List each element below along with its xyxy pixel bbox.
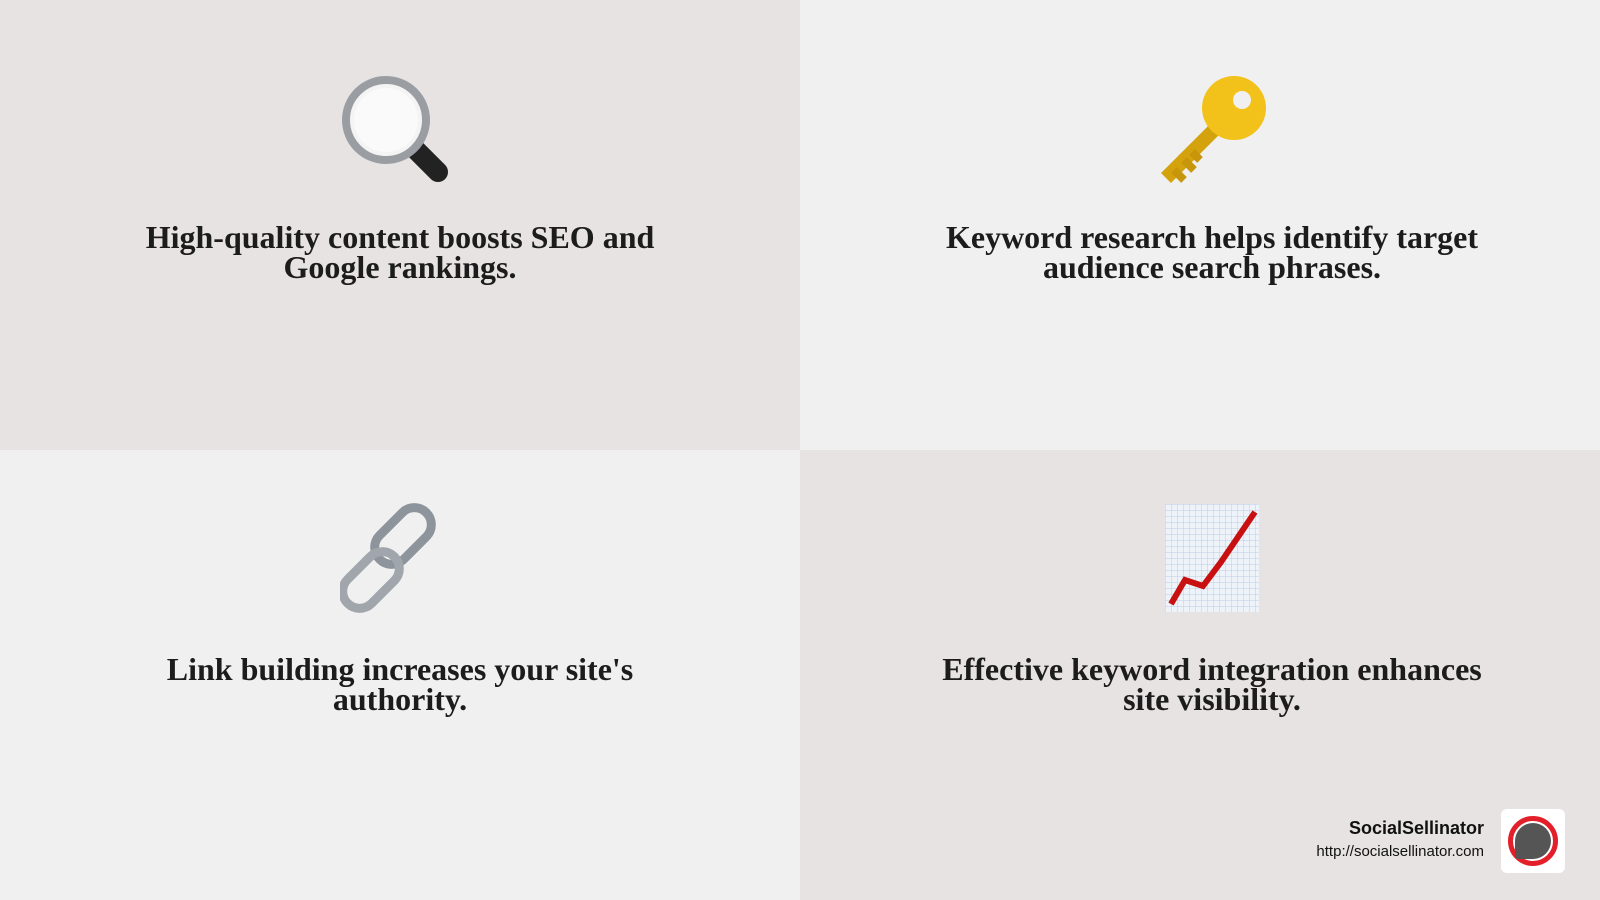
text: content: Google rankings.: [284, 249, 516, 285]
panel: content: [0, 0, 800, 450]
brand text: SocialSellinator: [1349, 818, 1484, 838]
text: links: [167, 651, 633, 717]
panel: integration: [800, 450, 1600, 900]
icon: magnifier: [342, 76, 448, 182]
icon: key: [1161, 76, 1266, 183]
icon: chart: [1165, 504, 1259, 612]
text: keyword: [946, 219, 1478, 285]
text: integration: Effective keyword integration enhances: [942, 651, 1482, 687]
text: links: authority.: [333, 681, 467, 717]
icon: chain: [340, 503, 436, 613]
text: integration: site visibility.: [1123, 681, 1301, 717]
text: links: Link building increases your site's: [167, 651, 633, 687]
text: keyword: audience search phrases.: [1043, 249, 1381, 285]
text: keyword: Keyword research helps identify target: [946, 219, 1478, 255]
brand text: [1316, 818, 1484, 860]
brand text: http://socialsellinator.com: [1316, 843, 1484, 860]
panel: keyword: [800, 0, 1600, 450]
logo: [1501, 809, 1565, 873]
text: integration: [942, 651, 1482, 717]
text: content: [146, 219, 654, 285]
panel: links: [0, 450, 800, 900]
text: content: High-quality content boosts SEO and: [146, 219, 654, 255]
